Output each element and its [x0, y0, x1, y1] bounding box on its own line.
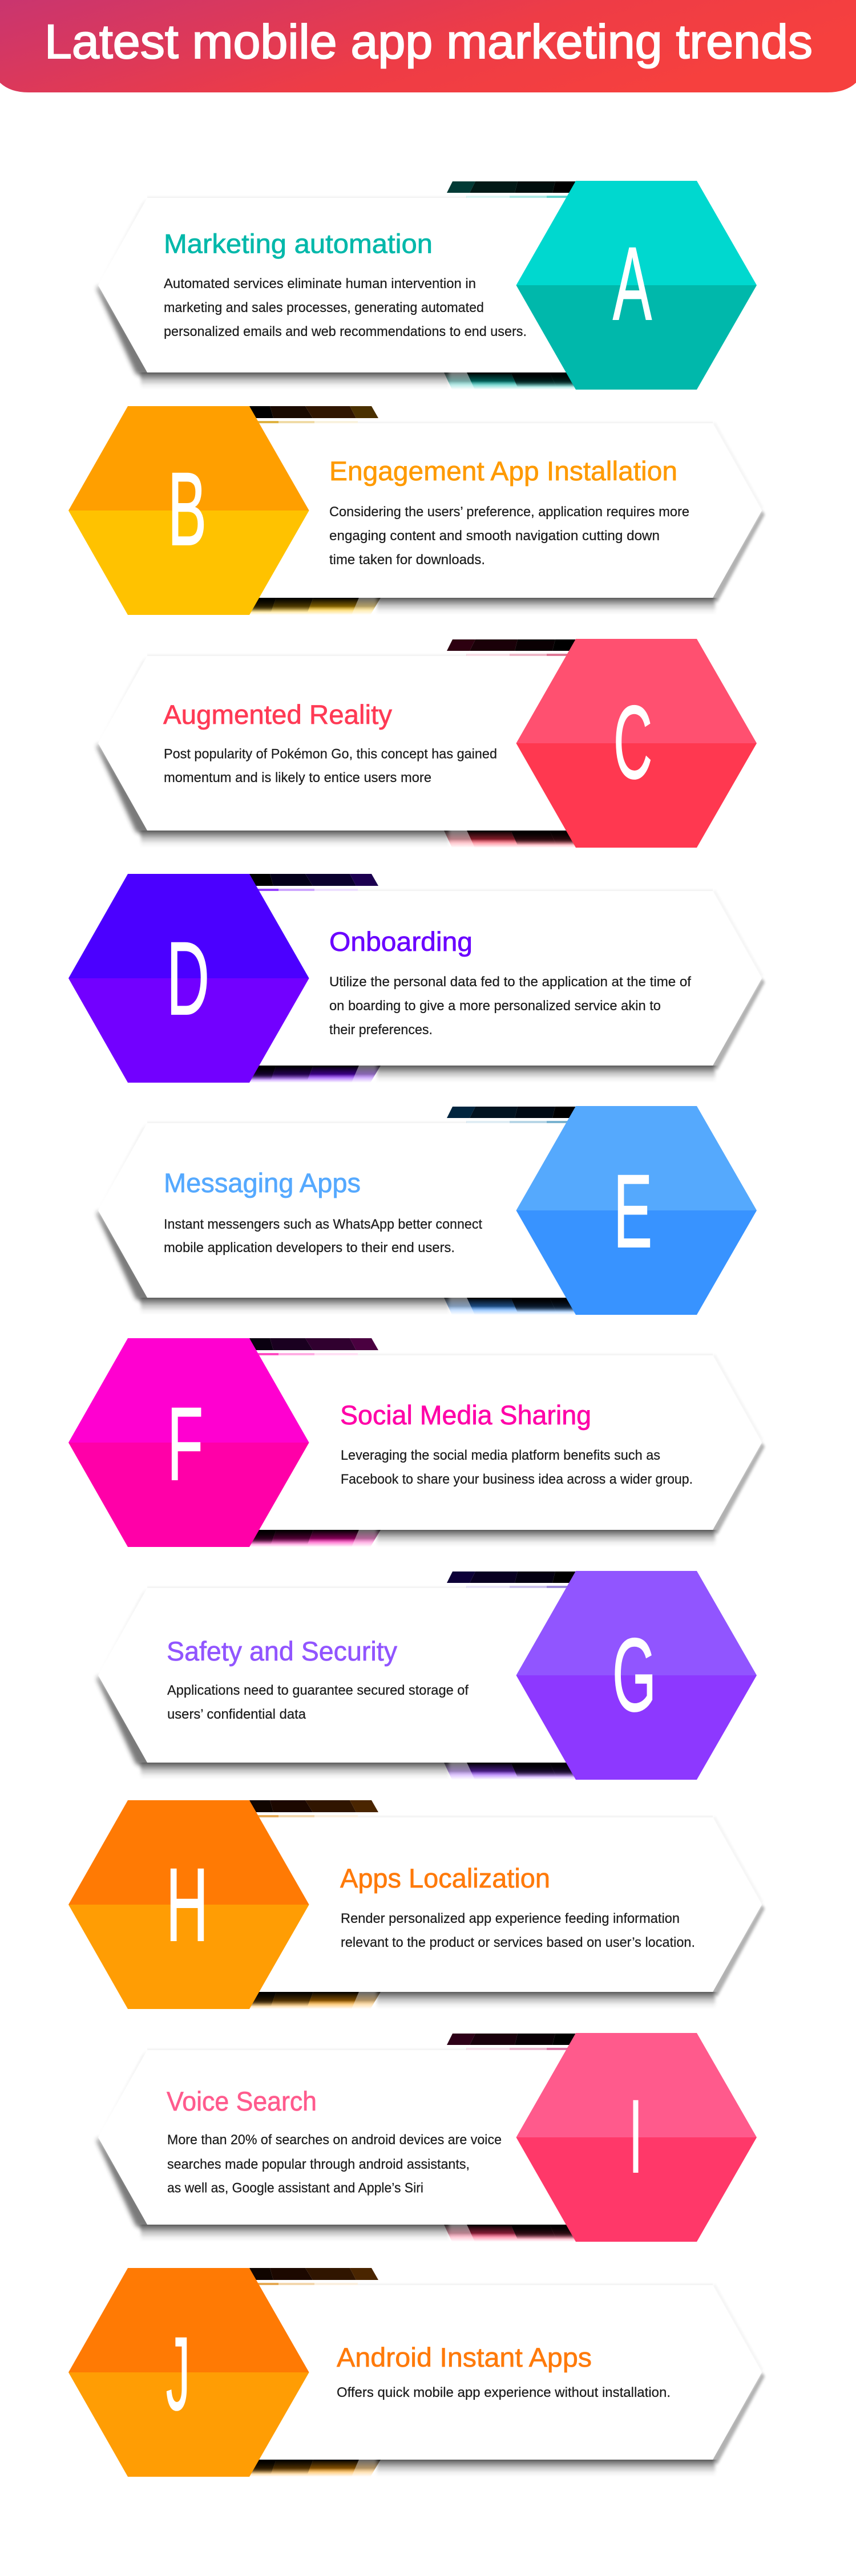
hexagon badge G: G [612, 1617, 656, 1733]
card body [98, 656, 593, 831]
description [164, 746, 497, 785]
title banner [0, 0, 856, 92]
description: on boarding to give a more personalized service akin to [329, 998, 661, 1014]
description: Leveraging the social media platform benefits such as [341, 1448, 660, 1463]
card H: Apps Localization [68, 1800, 765, 2009]
description: Utilize the personal data fed to the application at the time of [329, 974, 691, 990]
hexagon badge E: E [613, 1153, 652, 1269]
card body [268, 891, 762, 1066]
card F: Social Media Sharing [68, 1338, 765, 1547]
hexagon badge I [516, 2033, 757, 2242]
hexagon badge B [68, 406, 309, 615]
hexagon badge C [516, 639, 757, 848]
card E: Messaging Apps [96, 1106, 757, 1315]
description: Instant messengers such as WhatsApp better connect [164, 1217, 482, 1232]
card body [98, 198, 593, 372]
card body [268, 2285, 762, 2460]
description [341, 1911, 695, 1950]
description: Automated services eliminate human intervention in [164, 276, 476, 291]
description: Applications need to guarantee secured storage of [167, 1683, 469, 1698]
hexagon badge J: J [166, 2315, 190, 2432]
card body [268, 423, 762, 598]
description: Offers quick mobile app experience without installation. [337, 2385, 671, 2400]
hexagon badge C: C [613, 684, 652, 800]
card G: Safety and Security [96, 1571, 757, 1780]
description [164, 276, 527, 339]
description: users’ confidential data [167, 1707, 306, 1722]
hexagon badge F [68, 1338, 309, 1547]
description [341, 1448, 693, 1487]
description [329, 504, 689, 568]
card body [268, 1817, 762, 1992]
description: relevant to the product or services based on user’s location. [341, 1935, 695, 1950]
card body [98, 1123, 593, 1298]
hexagon badge J [68, 2268, 309, 2477]
description: engaging content and smooth navigation cutting down [329, 528, 660, 544]
description: Post popularity of Pokémon Go, this concept has gained [164, 746, 497, 762]
description [167, 1683, 469, 1722]
hexagon badge A: A [613, 225, 652, 342]
heading: Augmented Reality [163, 699, 392, 730]
description: their preferences. [329, 1022, 433, 1038]
hexagon badge I: I [629, 2078, 643, 2194]
description: Render personalized app experience feeding information [341, 1911, 680, 1926]
title: Latest mobile app marketing trends [45, 15, 813, 68]
heading: Messaging Apps [164, 1168, 361, 1198]
heading: Voice Search [167, 2086, 317, 2116]
description: personalized emails and web recommendations to end users. [164, 324, 527, 339]
description: marketing and sales processes, generating automated [164, 300, 484, 315]
heading: Android Instant Apps [337, 2342, 592, 2372]
description: Considering the users’ preference, application requires more [329, 504, 689, 520]
hexagon badge H: H [166, 1846, 208, 1963]
description: Facebook to share your business idea across a wider group. [341, 1472, 693, 1487]
card I: Voice Search [96, 2033, 757, 2242]
description [167, 2132, 502, 2196]
card C: Augmented Reality [96, 639, 757, 848]
hexagon badge D [68, 874, 309, 1083]
card body [98, 1588, 593, 1763]
description [164, 1217, 482, 1255]
card J: Android Instant Apps [68, 2268, 765, 2477]
hexagon badge B: B [168, 451, 207, 567]
heading: Onboarding [329, 926, 473, 957]
card D: Onboarding [68, 874, 765, 1083]
description: searches made popular through android assistants, [167, 2157, 470, 2172]
description: More than 20% of searches on android devices are voice [167, 2132, 502, 2148]
description [329, 974, 691, 1038]
hexagon badge E [516, 1106, 757, 1315]
description: momentum and is likely to entice users more [164, 770, 431, 785]
heading: Marketing automation [164, 228, 433, 259]
heading: Safety and Security [167, 1636, 397, 1666]
description: as well as, Google assistant and Apple’s Siri [167, 2180, 423, 2196]
hexagon badge D: D [167, 920, 209, 1036]
card body [268, 1355, 762, 1530]
description: time taken for downloads. [329, 552, 485, 568]
description: mobile application developers to their end users. [164, 1240, 455, 1255]
hexagon badge H [68, 1800, 309, 2009]
heading: Engagement App Installation [329, 456, 677, 486]
heading: Social Media Sharing [340, 1400, 591, 1430]
card body [98, 2050, 593, 2225]
heading: Apps Localization [340, 1863, 550, 1893]
hexagon badge A [516, 181, 757, 390]
card A: Marketing automation [96, 181, 757, 390]
hexagon badge F: F [167, 1386, 203, 1502]
hexagon badge G [516, 1571, 757, 1780]
card B: Engagement App Installation [68, 406, 765, 615]
